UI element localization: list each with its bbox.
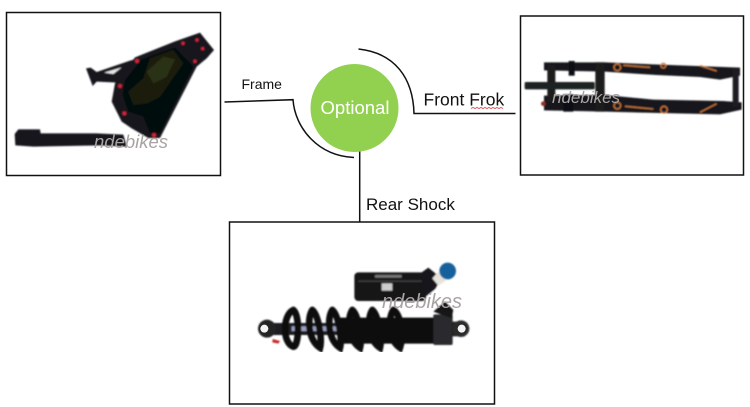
watermark: frame: ndebikes — [94, 131, 168, 152]
watermark: fork: ndebikes — [552, 88, 621, 107]
panel: frame photo — [6, 12, 220, 176]
watermark: shock: ndebikes — [382, 291, 462, 313]
central circle: Optional: Optional — [321, 97, 389, 118]
icon: e-bike frame — [15, 33, 214, 147]
icon: front fork — [525, 61, 742, 114]
connector: front fork — [358, 49, 516, 114]
connector: frame — [224, 100, 354, 158]
connector: rear shock — [359, 150, 361, 222]
central circle: Optional — [310, 64, 398, 152]
label: Front Frok: Front Frok — [424, 90, 504, 110]
label: Rear Shock: Rear Shock — [366, 195, 455, 214]
icon: rear shock — [258, 263, 469, 348]
panel: rear shock photo — [230, 222, 494, 404]
panel: front fork photo — [520, 16, 744, 175]
label: Frame: Frame — [242, 76, 282, 92]
